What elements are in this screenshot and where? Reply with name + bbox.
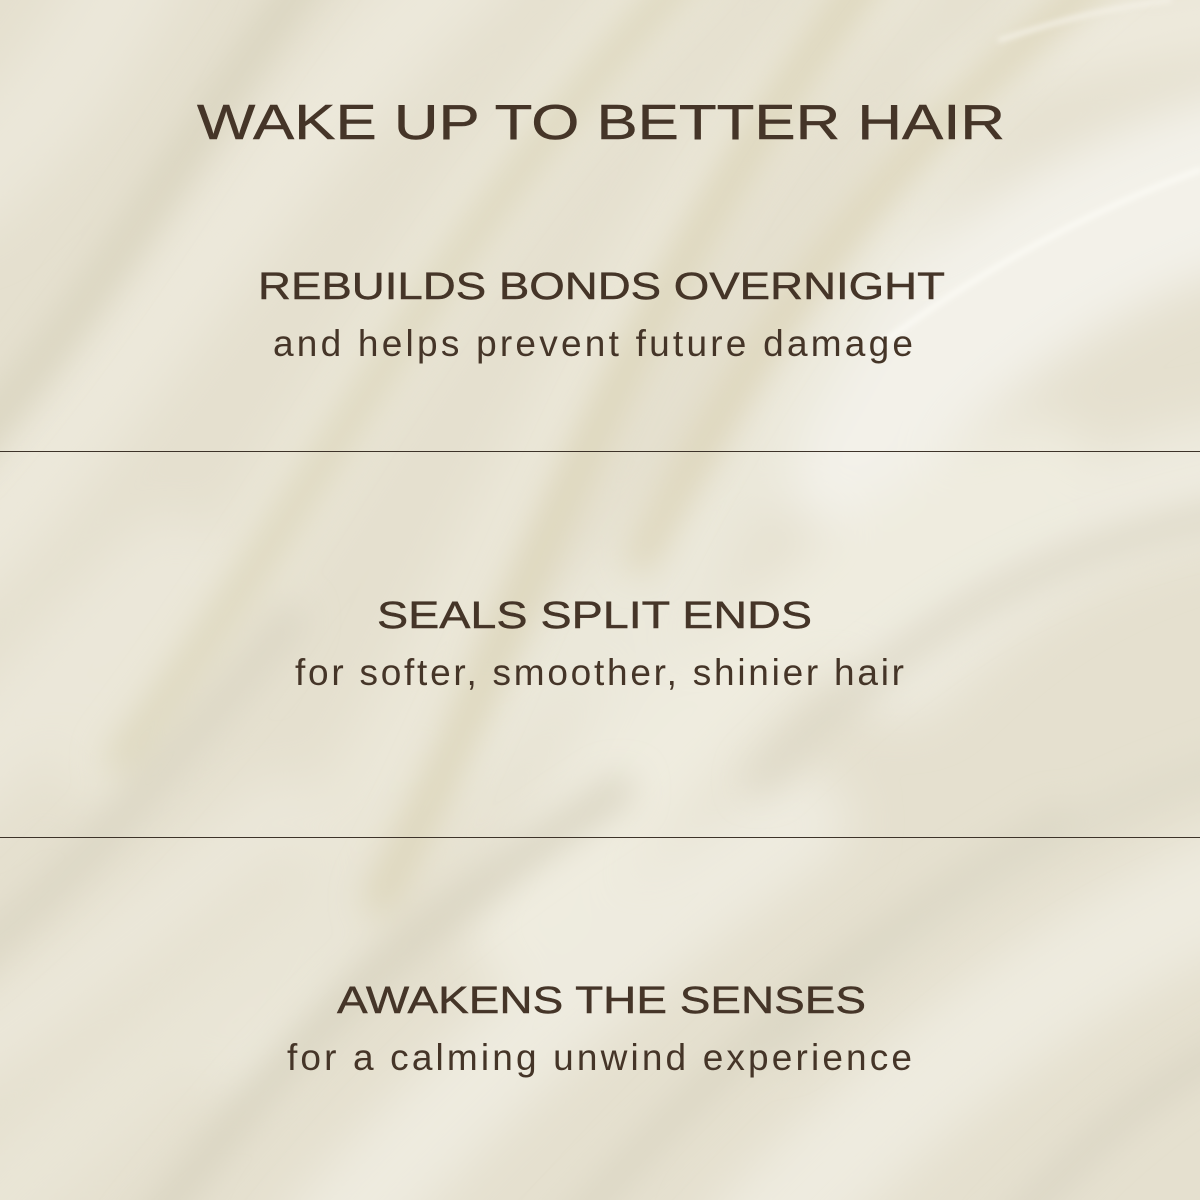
benefit 2 description: for softer, smoother, shinier hair	[295, 652, 904, 693]
benefit 1 heading: REBUILDS BONDS OVERNIGHT	[258, 266, 945, 308]
title: WAKE UP TO BETTER HAIR	[197, 96, 1005, 150]
benefit 2: seals split ends	[295, 595, 904, 693]
benefit 3 heading: AWAKENS THE SENSES	[337, 980, 866, 1022]
benefit 2 heading: SEALS SPLIT ENDS	[377, 595, 812, 637]
benefit 3 description: for a calming unwind experience	[287, 1037, 912, 1078]
benefit 3: awakens the senses	[287, 980, 912, 1078]
benefit 1: rebuilds bonds	[258, 266, 945, 364]
benefit 1 description: and helps prevent future damage	[273, 323, 913, 364]
